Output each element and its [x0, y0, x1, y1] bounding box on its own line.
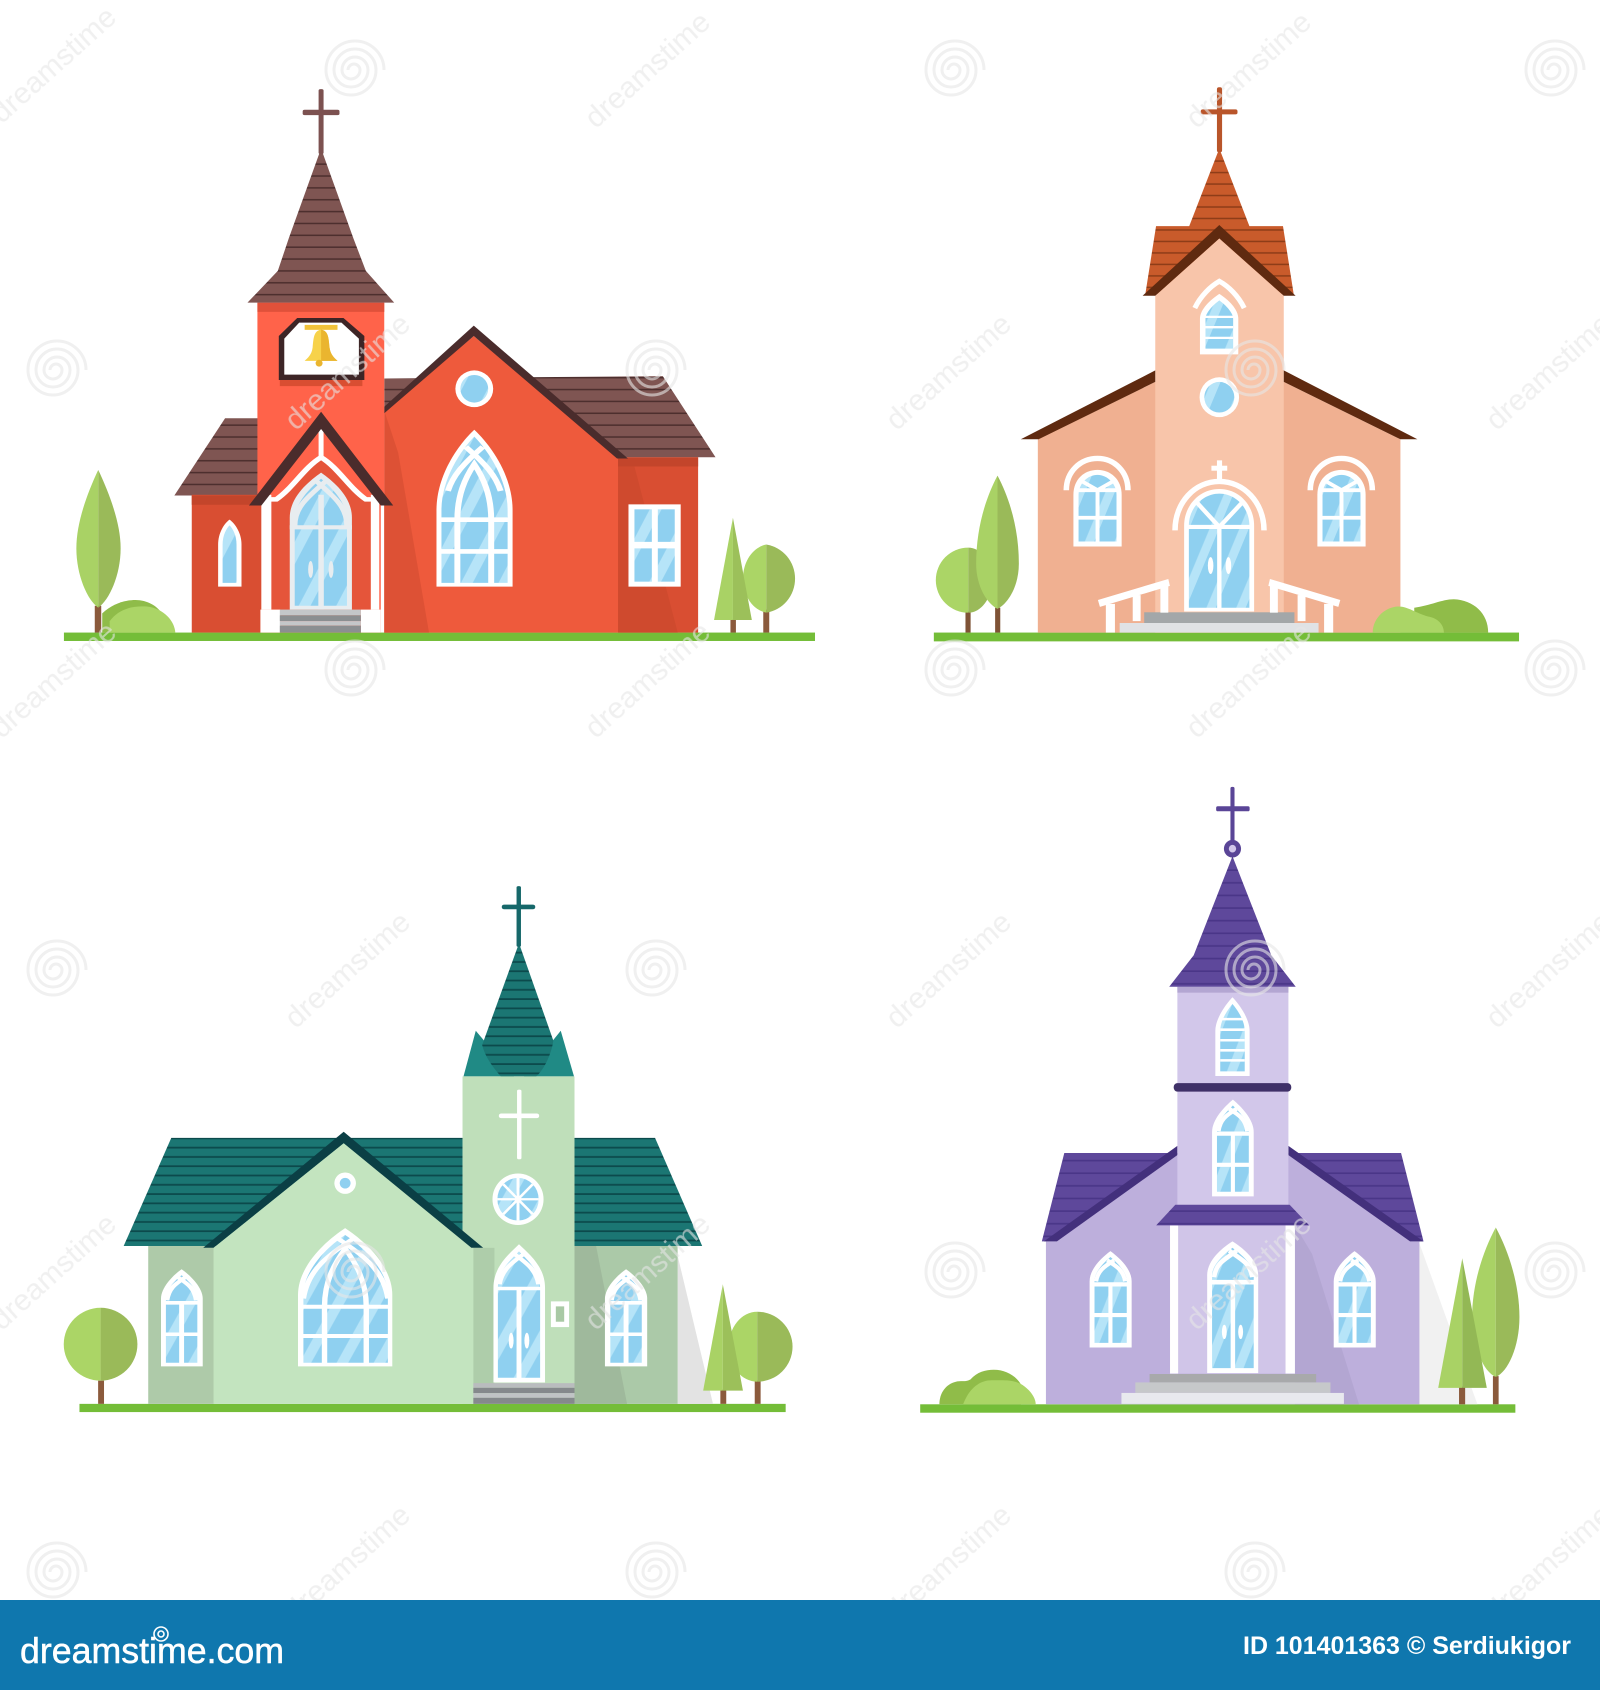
trees: right	[1438, 1228, 1519, 1404]
watermarks: dreamstime	[1179, 5, 1318, 135]
door	[1175, 460, 1264, 612]
roof trim	[1044, 1146, 1424, 1241]
ground	[64, 633, 815, 641]
church: red with bell tower	[64, 89, 815, 641]
watermarks: dreamstime	[1179, 615, 1318, 745]
ground	[920, 1404, 1515, 1413]
walls	[1038, 238, 1400, 633]
porch	[249, 412, 393, 633]
roof trim	[1021, 225, 1417, 439]
walls: side wings	[192, 457, 698, 633]
steps	[1121, 1374, 1344, 1404]
shadow	[678, 1256, 713, 1404]
tower white cross	[499, 1090, 539, 1159]
ground	[934, 633, 1519, 641]
cross with ball	[1216, 787, 1250, 858]
bush	[1373, 599, 1488, 633]
tree: left cypress	[76, 470, 121, 633]
watermarks: dreamstime	[278, 307, 417, 437]
cross	[1201, 87, 1238, 152]
cross	[303, 89, 339, 154]
window: left	[161, 1269, 203, 1366]
roofs	[124, 1138, 702, 1246]
steps	[280, 610, 361, 633]
tower	[257, 303, 384, 506]
window: rectangular	[628, 504, 681, 587]
wall: main gable	[384, 326, 628, 633]
icon: logo spiral	[154, 1627, 168, 1641]
trees: right	[714, 518, 795, 633]
shadow	[1419, 1244, 1477, 1404]
church: green	[64, 886, 793, 1412]
spire	[247, 148, 394, 303]
watermarks: dreamstime	[278, 1498, 417, 1628]
footer logo text: dreamstime.com	[20, 1630, 284, 1671]
trees: left	[936, 476, 1019, 633]
window: tower middle	[1212, 1100, 1254, 1196]
walls: side wings	[148, 1246, 678, 1404]
roofs	[1042, 1153, 1424, 1241]
image id and credit: ID 101401363 © Serdiukigor	[1243, 1632, 1571, 1660]
watermarks: dreamstime	[879, 905, 1018, 1035]
watermarks: dreamstime	[879, 307, 1018, 437]
window: upper louvred	[1215, 997, 1250, 1076]
window: left	[1090, 1251, 1132, 1347]
wall: main gable	[203, 1132, 483, 1404]
spire	[1169, 856, 1296, 987]
watermarks: dreamstime	[578, 5, 717, 135]
window: right	[1334, 1251, 1376, 1347]
ground	[79, 1404, 786, 1412]
window: large gothic	[436, 430, 513, 587]
window: large gothic	[298, 1228, 392, 1366]
watermarks: dreamstime	[578, 615, 717, 745]
trees: right	[703, 1284, 793, 1404]
window: wheel	[492, 1174, 544, 1225]
church: purple	[920, 787, 1519, 1413]
porch	[1156, 1205, 1359, 1404]
bush	[102, 600, 175, 633]
tower	[1177, 987, 1288, 1206]
railings	[1098, 579, 1340, 633]
window: small round	[334, 1172, 356, 1194]
shaded strip	[473, 1248, 494, 1384]
window: small left	[218, 520, 241, 587]
steps	[1120, 612, 1319, 633]
door	[1207, 1241, 1258, 1373]
tree: left round	[64, 1308, 137, 1404]
watermarks: dreamstime	[278, 905, 417, 1035]
watermarks: dreamstime	[578, 1207, 717, 1337]
window: round	[1200, 377, 1239, 417]
spires	[464, 943, 574, 1076]
bush	[939, 1370, 1036, 1404]
cross	[502, 886, 535, 947]
window: right	[605, 1269, 647, 1366]
window: tower upper	[1195, 281, 1244, 354]
tower	[463, 1076, 574, 1404]
footer bar	[0, 1600, 1600, 1690]
church: peach	[934, 87, 1519, 641]
door	[493, 1244, 545, 1382]
back roofs	[174, 376, 716, 496]
window: left arched	[1066, 458, 1128, 546]
band	[1174, 1083, 1291, 1092]
door	[290, 473, 352, 610]
watermarks: dreamstime	[879, 1498, 1018, 1628]
upper roof and spire	[1145, 148, 1294, 294]
wall	[1046, 1155, 1419, 1404]
watermarks: dreamstime	[1179, 1207, 1318, 1337]
window: round	[455, 370, 493, 407]
wall sign	[551, 1301, 569, 1327]
window: right arched	[1310, 458, 1372, 546]
steps	[473, 1383, 574, 1404]
icon: bell in opening	[279, 318, 364, 386]
